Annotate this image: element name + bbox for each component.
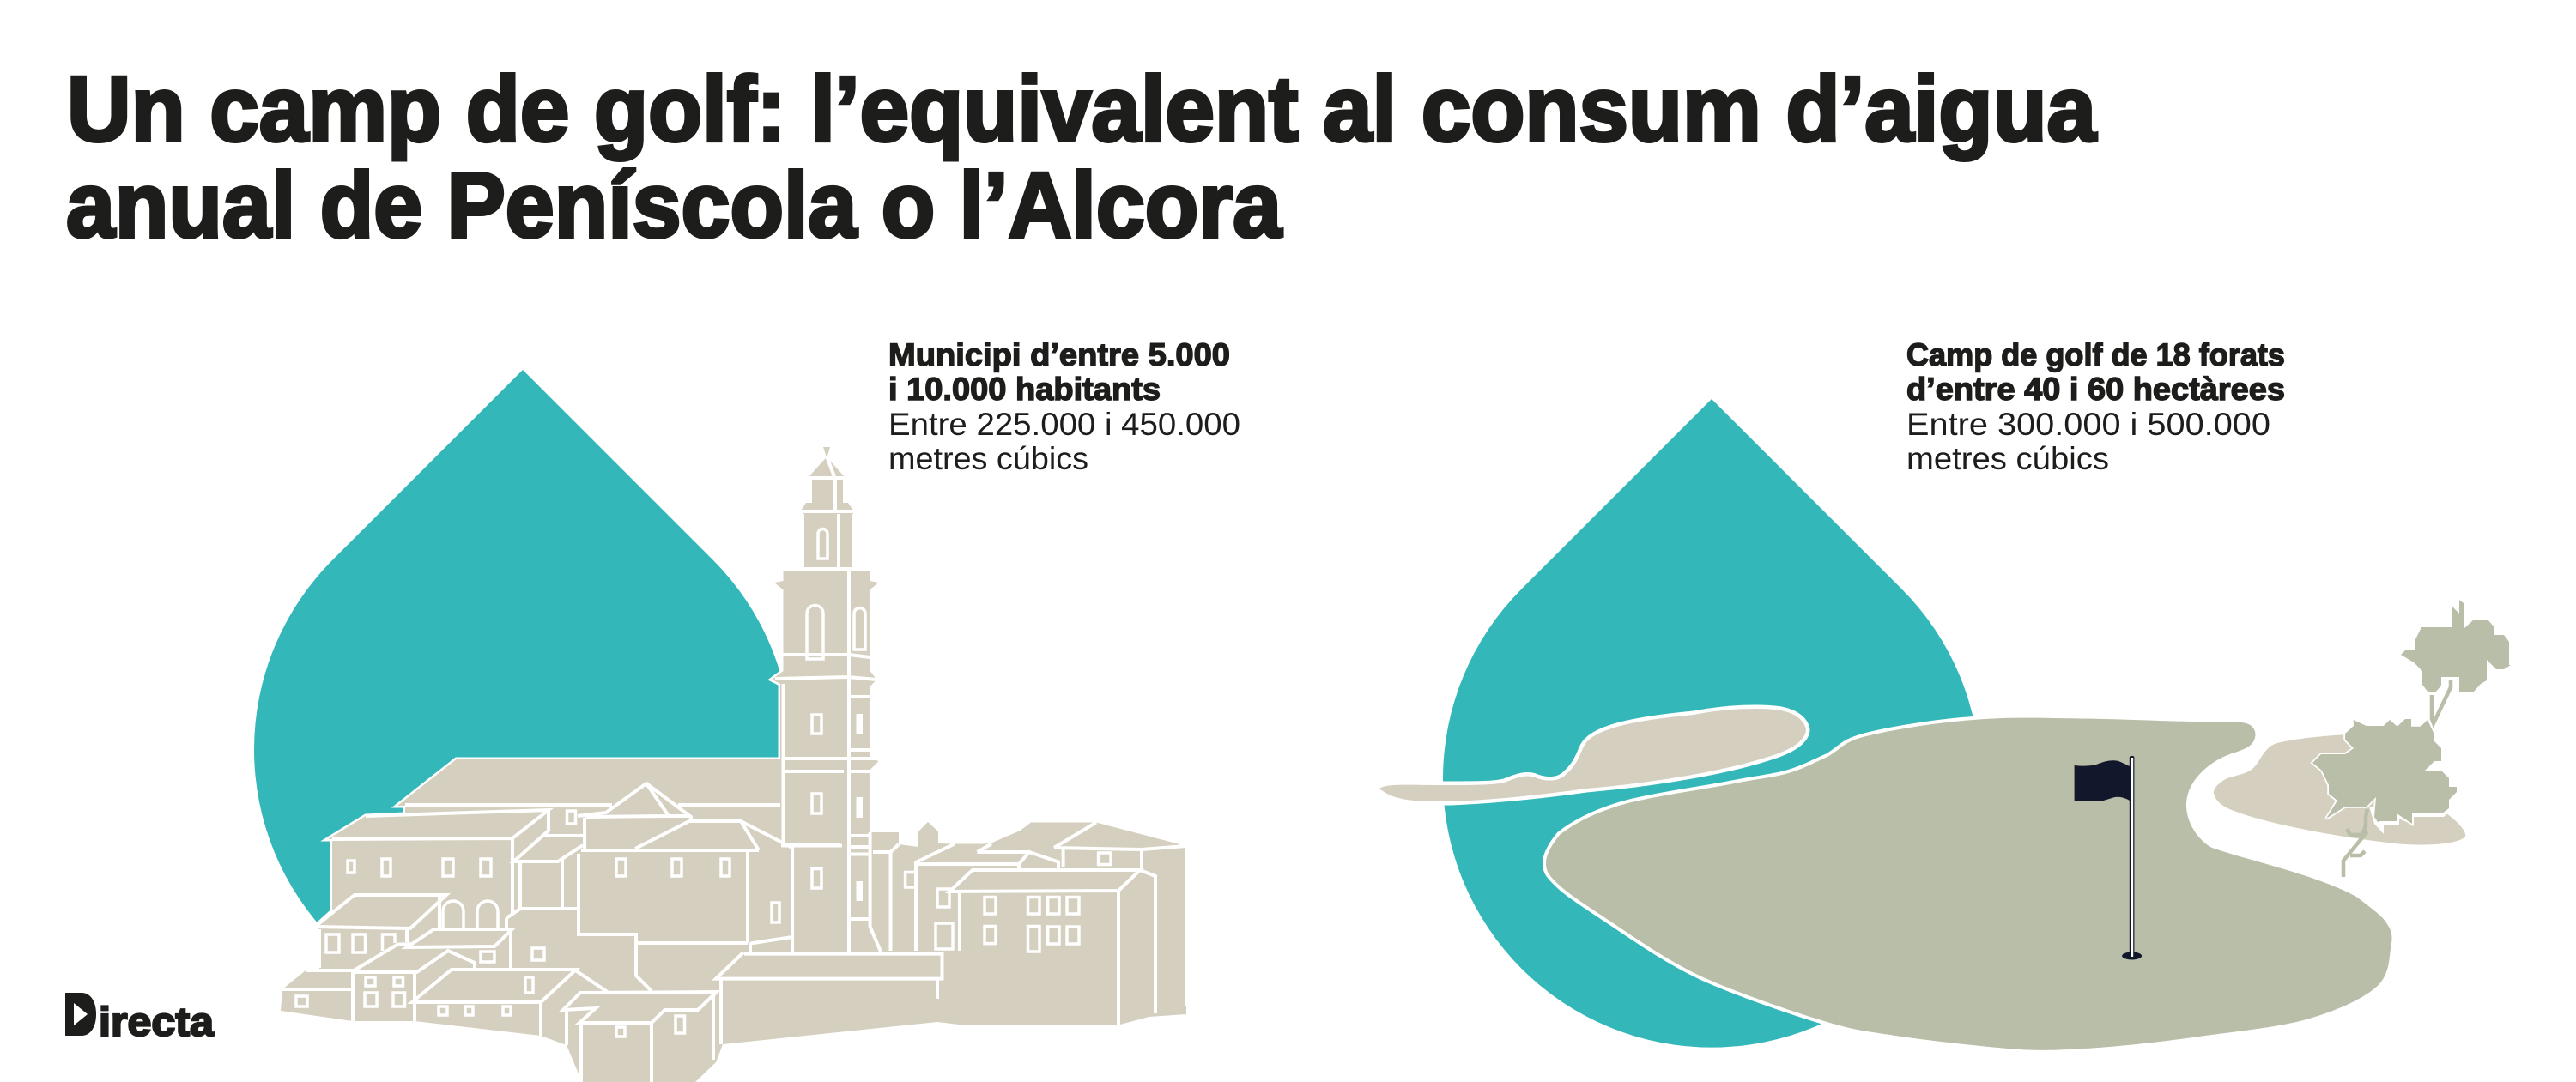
text block: golf course: Camp de golf de 18 forats: [1906, 337, 2285, 372]
white outline of tree: [2369, 807, 2449, 834]
text block: municipality: [888, 337, 1240, 476]
title: anual de Peníscola o l’Alcora: [66, 153, 1282, 257]
logo: Directa: [65, 993, 215, 1044]
title: [66, 57, 2097, 257]
text block: municipality: i 10.000 habitants: [888, 372, 1161, 407]
text block: golf course: d’entre 40 i 60 hectàrees: [1906, 372, 2285, 407]
panel: golf water drop: [1443, 399, 1980, 1048]
sand bunker left: [1379, 709, 1806, 801]
text block: golf course: [1906, 337, 2285, 476]
central and left houses lines: [282, 783, 842, 1082]
church tower lines: [775, 457, 881, 952]
text block: golf course: Entre 300.000 i 500.000: [1906, 407, 2270, 442]
golf hole: [2122, 952, 2142, 959]
logo: Directa: irecta: [99, 999, 215, 1044]
text block: municipality: Municipi d’entre 5.000: [888, 337, 1230, 372]
text block: municipality: metres cúbics: [888, 441, 1088, 476]
text block: municipality: Entre 225.000 i 450.000: [888, 407, 1240, 442]
illustration: golf course: [1379, 600, 2511, 1050]
illustration: village with church tower: [281, 447, 1186, 1082]
sand bunker right: [2214, 734, 2465, 845]
tree top right: [2401, 600, 2511, 692]
text block: golf course: metres cúbics: [1906, 441, 2109, 476]
fairway green: [1546, 718, 2391, 1050]
right houses lines: [716, 822, 1185, 1044]
flag pole: [2130, 756, 2134, 957]
title: Un camp de golf: l’equivalent al consum d’aigua: [67, 57, 2097, 160]
tree trunks: [2343, 680, 2451, 877]
village silhouette: [281, 447, 1186, 1082]
tree with bunker: [2312, 719, 2457, 824]
panel: municipality water drop: [254, 370, 791, 1019]
flag: [2075, 760, 2130, 801]
